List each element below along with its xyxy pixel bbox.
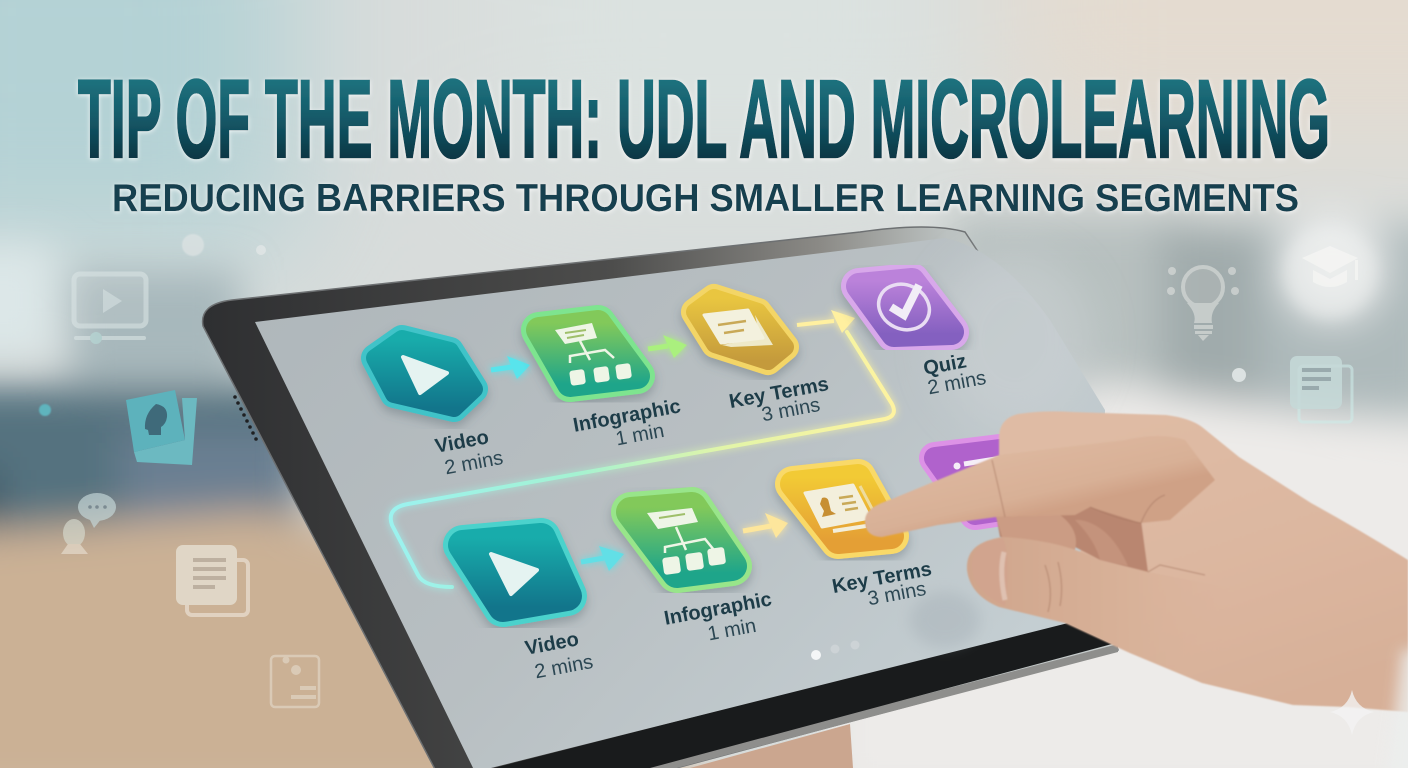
card: infographic 1 min: Infographic: [571, 395, 682, 437]
card: quiz 2 mins: 2 mins: [926, 367, 988, 399]
tablet: [203, 227, 1118, 768]
card: video 2 mins: [375, 339, 505, 479]
thumbnail: [972, 538, 1008, 606]
knuckle creases: [992, 460, 1205, 612]
tablet speaker: [233, 395, 258, 441]
card: video 2 mins: 2 mins: [443, 447, 505, 479]
card: infographic 1 min: 1 min: [614, 420, 666, 450]
hand: [865, 411, 1408, 712]
subtitle: REDUCING BARRIERS THROUGH SMALLER LEARNING SEGMENTS: [112, 177, 1299, 220]
tablet body: [203, 227, 1118, 768]
bokeh dots: [39, 234, 1246, 416]
arrow: [743, 513, 788, 538]
card: quiz 2 mins: [859, 276, 988, 399]
supporting fingers below tablet: [690, 724, 853, 768]
card: key terms 3 mins: [793, 477, 933, 610]
tablet bottom frame: [650, 644, 1118, 768]
card: video 2 mins: Video: [433, 426, 491, 458]
floating icon: speech bubble and person: [61, 493, 116, 554]
floating icon: note: [1290, 356, 1352, 422]
pagination dots: [811, 640, 860, 660]
card: key terms 3 mins: 3 mins: [760, 394, 822, 426]
thumb: [967, 537, 1240, 683]
floating icon: light bulb: [1167, 267, 1239, 341]
card: infographic 1 min: 1 min: [706, 615, 758, 645]
floating icon: clipboard: [271, 656, 319, 707]
sleeve edge: [1385, 650, 1408, 768]
floating icon: graduation cap: [1284, 226, 1376, 318]
card: video 2 mins: [463, 538, 595, 683]
card: infographic 1 min: [539, 323, 682, 450]
connector line: [391, 332, 894, 587]
arrow: [797, 310, 855, 333]
card row 1: [375, 276, 988, 479]
card: infographic 1 min: [631, 507, 773, 645]
screen reflection: [935, 250, 1095, 430]
card: key terms 3 mins: 3 mins: [866, 578, 928, 610]
card: key terms 3 mins: Key Terms: [830, 558, 933, 598]
card row 2: [463, 450, 1002, 683]
card: key terms 3 mins: Key Terms: [727, 373, 830, 413]
card: key terms 3 mins: [695, 298, 830, 426]
card: quiz 2 mins: Quiz: [922, 350, 968, 380]
card: partly hidden purple tile: [935, 450, 1002, 514]
floating icon: brain book: [126, 390, 197, 465]
arrow: [491, 356, 530, 379]
arrow: [581, 546, 624, 571]
middle and ring fingers: [996, 505, 1148, 572]
palm and back of hand: [999, 411, 1408, 712]
hand shadow on screen: [910, 592, 980, 648]
card: video 2 mins: Video: [523, 628, 581, 660]
card: video 2 mins: 2 mins: [533, 651, 595, 683]
card: infographic 1 min: Infographic: [662, 588, 773, 630]
arrow: [648, 335, 687, 358]
sparkle watermark: [1330, 690, 1374, 735]
index finger: [865, 436, 1215, 537]
tablet screen: [255, 238, 1105, 768]
floating icon: video player: [74, 274, 146, 344]
floating icon: document stack: [176, 545, 248, 615]
